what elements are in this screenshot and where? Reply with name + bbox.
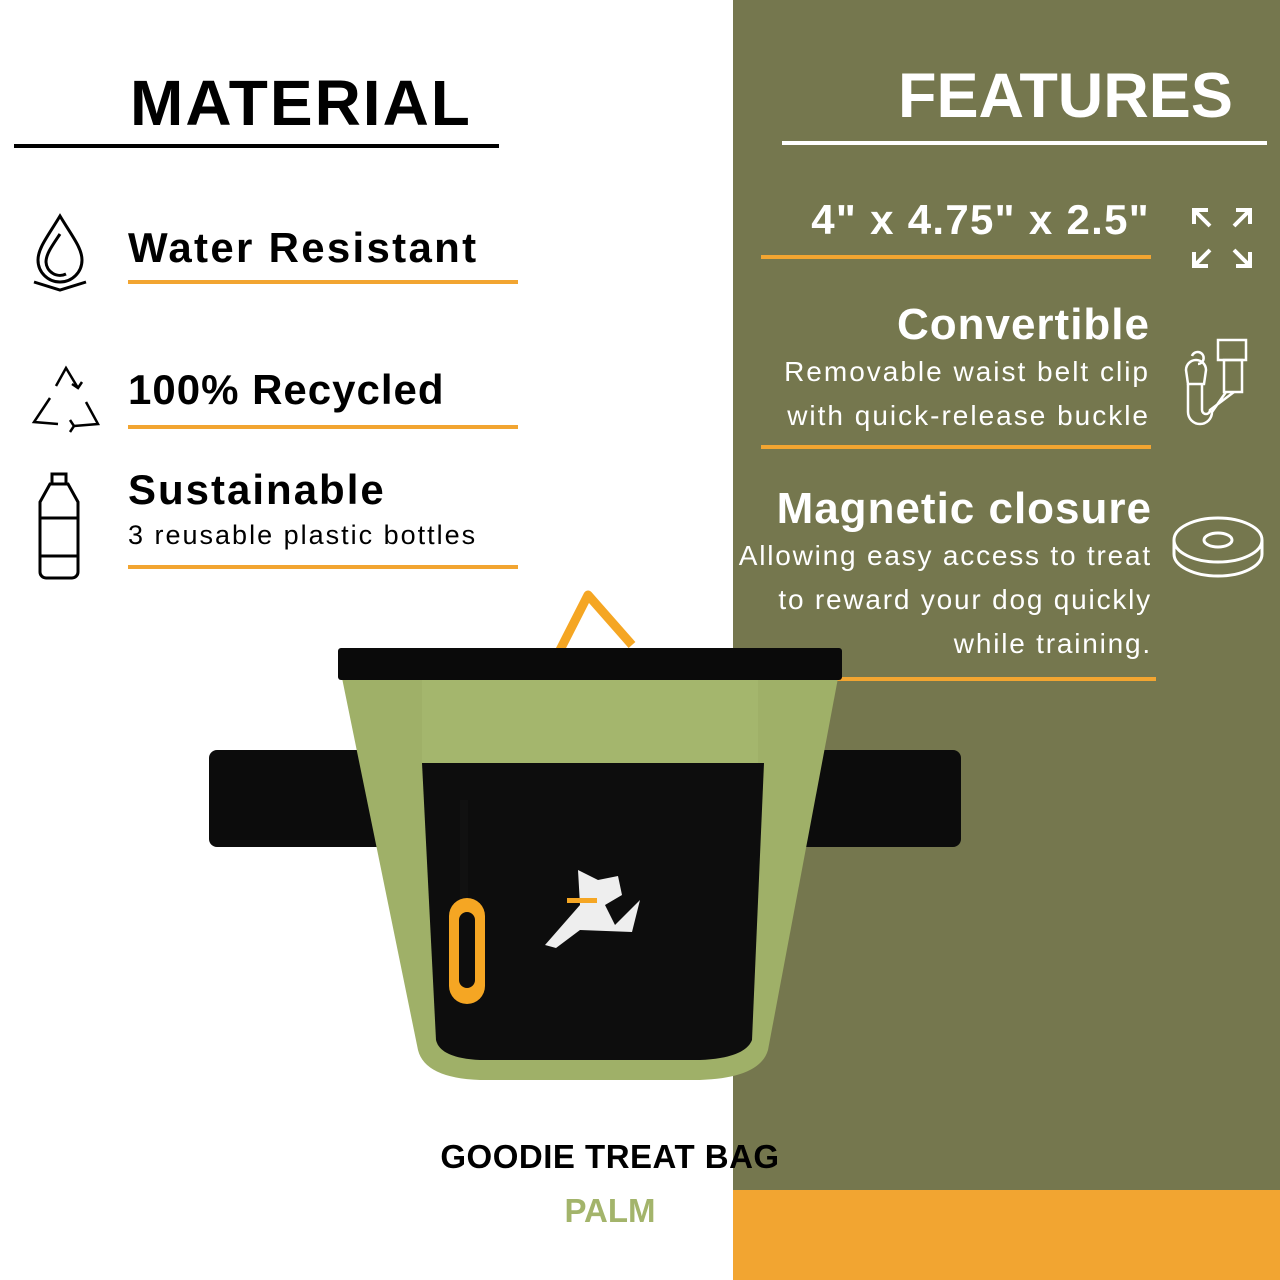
text: convertible: Removable waist belt clip	[784, 356, 1150, 387]
heading: material: MATERIAL	[130, 67, 472, 139]
text: sustainable	[128, 466, 477, 550]
product image: treat bag	[209, 590, 961, 1080]
carabiner	[560, 595, 632, 650]
text: 100% recycled: 100% Recycled	[128, 366, 445, 413]
caption: product name: GOODIE TREAT BAG	[440, 1138, 780, 1175]
pocket	[422, 763, 764, 1060]
icon: magnet disc	[1172, 516, 1264, 578]
icon: bottle	[38, 472, 80, 580]
rim	[338, 648, 842, 680]
orange footer block	[733, 1190, 1280, 1280]
text: sustainable: Sustainable	[128, 466, 386, 513]
icon: water drop	[34, 213, 86, 292]
text: water resistant: Water Resistant	[128, 224, 478, 271]
text: sustainable: 3 reusable plastic bottles	[128, 520, 477, 550]
text: magnetic closure: Allowing easy access to treat	[739, 540, 1152, 571]
heading: features: FEATURES	[898, 61, 1233, 131]
icon: recycle	[32, 366, 100, 433]
text: convertible: Convertible	[897, 300, 1150, 349]
text: convertible	[784, 300, 1150, 431]
panel: features background	[733, 0, 1280, 1190]
icon: expand arrows	[1192, 208, 1252, 268]
text: magnetic closure	[738, 484, 1152, 659]
text: magnetic closure: to reward your dog quickly	[778, 584, 1152, 615]
text: convertible: with quick-release buckle	[787, 400, 1150, 431]
text: magnetic closure: while training.	[954, 628, 1152, 659]
dog	[545, 870, 640, 948]
body	[342, 678, 838, 1080]
zipper pull	[460, 800, 468, 910]
caption: colour: PALM	[564, 1192, 656, 1229]
text: magnetic closure: Magnetic closure	[777, 484, 1152, 533]
text: dimensions: 4" x 4.75" x 2.5"	[811, 196, 1150, 243]
icon: clip	[1184, 338, 1248, 426]
belt	[209, 750, 961, 847]
